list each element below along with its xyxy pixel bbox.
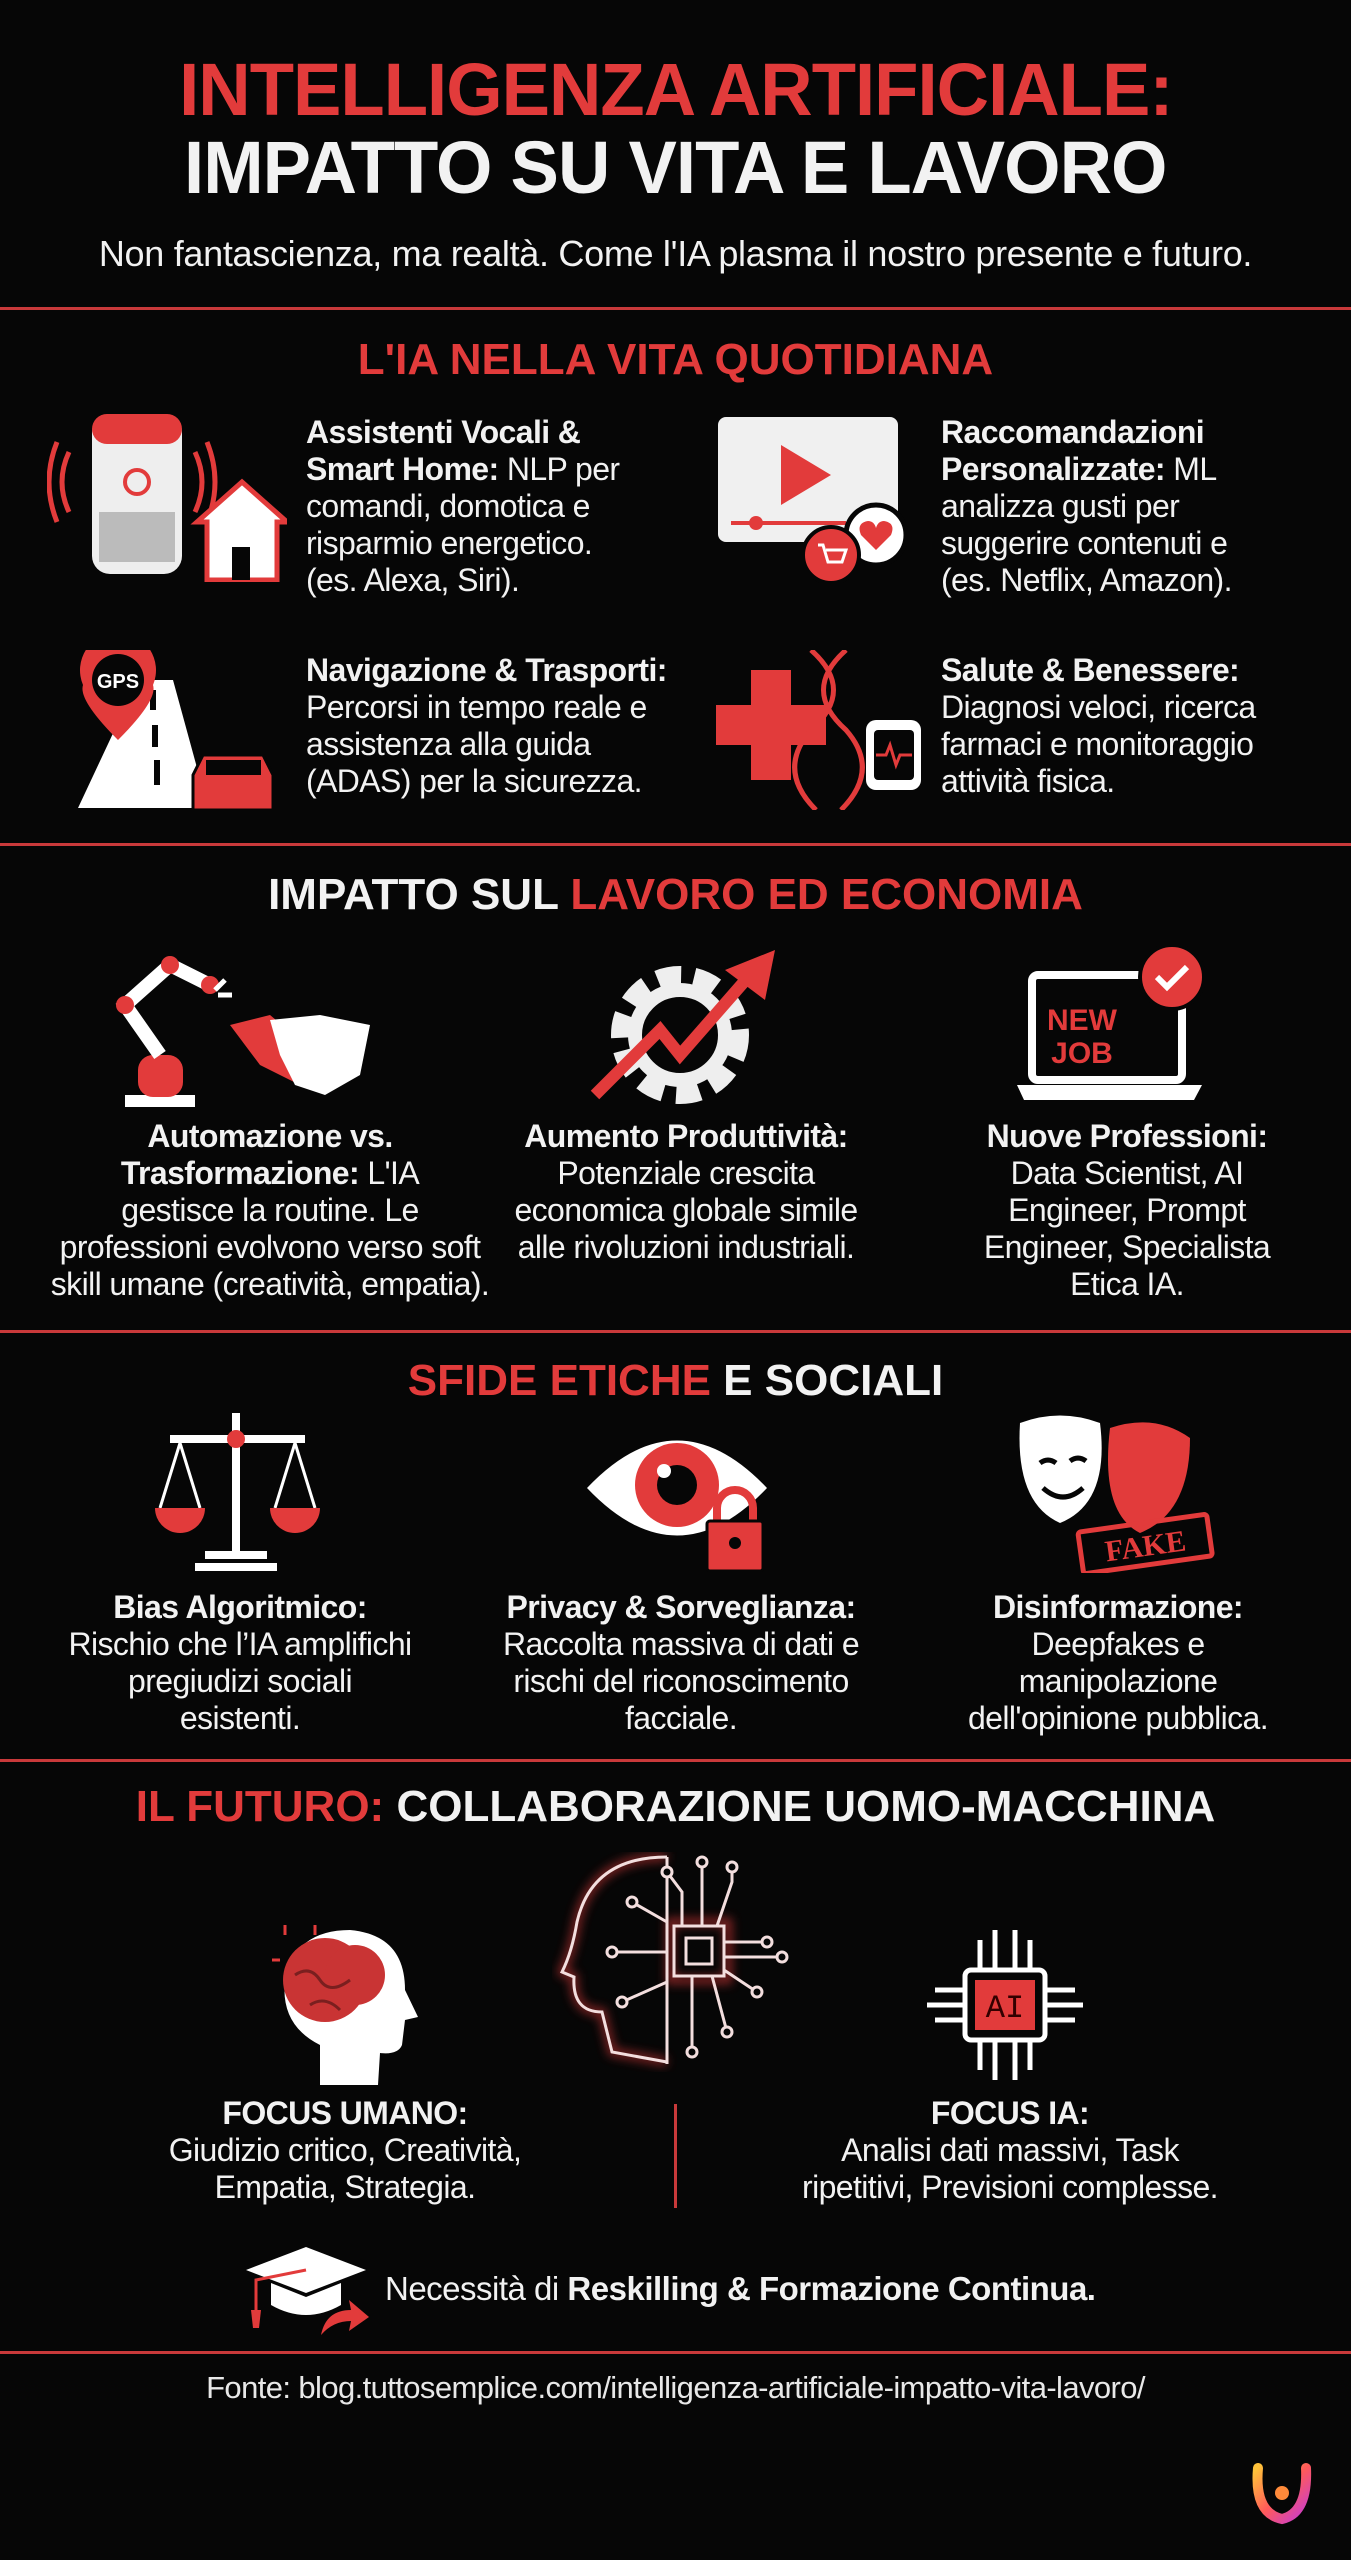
text: produttività: alle rivoluzioni industriali. xyxy=(518,1229,854,1265)
text: bias: esistenti. xyxy=(180,1700,300,1736)
text: salute xyxy=(941,652,1256,799)
icon: GPS navigation: GPS xyxy=(97,671,139,693)
text: raccomandazioni: Raccomandazioni xyxy=(941,414,1204,450)
icon: video recommendations xyxy=(718,417,904,581)
text: automazione xyxy=(51,1118,489,1302)
text: disinformazione: dell'opinione pubblica. xyxy=(968,1700,1268,1736)
text: nuove professioni: Nuove Professioni: xyxy=(987,1118,1267,1154)
text: raccomandazioni: Personalizzate: ML xyxy=(941,451,1217,487)
text: nuove professioni: Etica IA. xyxy=(1070,1266,1184,1302)
text: assistenti vocali: comandi, domotica e xyxy=(306,488,590,524)
text: reskilling: Necessità di Reskilling & Formazione Continua. xyxy=(385,2270,1095,2307)
text: focus umano: Empatia, Strategia. xyxy=(215,2169,475,2205)
subtitle: Non fantascienza, ma realtà. Come l'IA plasma il nostro presente e futuro. xyxy=(99,233,1252,274)
text: automazione: Automazione vs. xyxy=(147,1118,393,1154)
text: nuove professioni: Engineer, Specialista xyxy=(984,1229,1270,1265)
heading: lavoro: IMPATTO SUL xyxy=(268,870,558,919)
text: bias: pregiudizi sociali xyxy=(128,1663,352,1699)
text: raccomandazioni xyxy=(941,414,1232,598)
icon: masks fake xyxy=(1020,1416,1215,1573)
text: raccomandazioni: suggerire contenuti e xyxy=(941,525,1227,561)
heading: vita quotidiana: L'IA NELLA VITA QUOTIDIANA xyxy=(358,335,993,384)
heading: futuro: COLLABORAZIONE UOMO-MACCHINA xyxy=(396,1782,1215,1831)
text: focus umano: Giudizio critico, Creatività, xyxy=(169,2132,521,2168)
text: salute: farmaci e monitoraggio xyxy=(941,726,1253,762)
text: nuove professioni: Engineer, Prompt xyxy=(1008,1192,1246,1228)
icon: AI chip: AI xyxy=(986,1990,1024,2027)
icon: head brain circuit xyxy=(552,1852,788,2072)
text: produttività: Aumento Produttività: xyxy=(524,1118,848,1154)
text: nuove professioni: Data Scientist, AI xyxy=(1011,1155,1243,1191)
icon: eye & lock xyxy=(587,1440,767,1570)
title xyxy=(179,48,1172,209)
text: privacy: Raccolta massiva di dati e xyxy=(503,1626,859,1662)
text: privacy xyxy=(503,1589,859,1736)
text: navigazione: Percorsi in tempo reale e xyxy=(306,689,647,725)
heading: sfide etiche: SFIDE ETICHE xyxy=(408,1356,711,1405)
heading: sfide etiche: E SOCIALI xyxy=(723,1356,943,1405)
text: salute: Diagnosi veloci, ricerca xyxy=(941,689,1256,725)
text: produttività: economica globale simile xyxy=(514,1192,858,1228)
text: focus IA: ripetitivi, Previsioni complesse. xyxy=(802,2169,1218,2205)
text: focus umano xyxy=(169,2095,521,2205)
text: salute: Salute & Benessere: xyxy=(941,652,1239,688)
icon: new job laptop: JOB xyxy=(1051,1037,1113,1070)
text: bias xyxy=(68,1589,412,1736)
logo xyxy=(1252,2463,1312,2524)
text: focus umano: FOCUS UMANO: xyxy=(222,2095,468,2131)
text: disinformazione: Disinformazione: xyxy=(993,1589,1243,1625)
title: IMPATTO SU VITA E LAVORO xyxy=(184,126,1167,209)
text: automazione: gestisce la routine. Le xyxy=(121,1192,419,1228)
icon: health xyxy=(716,650,921,810)
icon: graduation cap xyxy=(246,2247,369,2335)
text: privacy: rischi del riconoscimento xyxy=(513,1663,849,1699)
text: disinformazione: Deepfakes e xyxy=(1031,1626,1205,1662)
text: produttività xyxy=(514,1118,858,1265)
heading: lavoro xyxy=(268,870,1083,919)
text: assistenti vocali: (es. Alexa, Siri). xyxy=(306,562,519,598)
heading: futuro: IL FUTURO: xyxy=(136,1782,384,1831)
text: navigazione: (ADAS) per la sicurezza. xyxy=(306,763,642,799)
text: focus IA: FOCUS IA: xyxy=(931,2095,1089,2131)
text: automazione: skill umane (creatività, empatia). xyxy=(51,1266,489,1302)
text: automazione: professioni evolvono verso soft xyxy=(60,1229,480,1265)
text: navigazione: assistenza alla guida xyxy=(306,726,590,762)
text: disinformazione: manipolazione xyxy=(1019,1663,1217,1699)
heading: lavoro: LAVORO ED ECONOMIA xyxy=(570,870,1083,919)
icon: human head with brain xyxy=(272,1925,418,2085)
text: bias: Rischio che l’IA amplifichi xyxy=(68,1626,412,1662)
text: assistenti vocali: risparmio energetico. xyxy=(306,525,592,561)
text: automazione: Trasformazione: L'IA xyxy=(121,1155,419,1191)
icon: robot arm & handshake xyxy=(116,956,370,1107)
text: assistenti vocali: Smart Home: NLP per xyxy=(306,451,619,487)
text: navigazione xyxy=(306,652,667,799)
text: focus IA xyxy=(802,2095,1218,2205)
text: navigazione: Navigazione & Trasporti: xyxy=(306,652,667,688)
text: raccomandazioni: (es. Netflix, Amazon). xyxy=(941,562,1232,598)
title: INTELLIGENZA ARTIFICIALE: xyxy=(179,48,1172,131)
text: assistenti vocali xyxy=(306,414,620,598)
icon: masks fake: FAKE xyxy=(1103,1524,1188,1568)
text: disinformazione xyxy=(968,1589,1268,1736)
icon: gear & growth xyxy=(590,950,775,1104)
icon: smart speaker and home xyxy=(47,414,287,582)
text: bias: Bias Algoritmico: xyxy=(113,1589,367,1625)
icon: new job laptop xyxy=(1017,947,1202,1100)
text: source: Fonte: blog.tuttosemplice.com/intelligenza-artificiale-impatto-vita-lavoro/ xyxy=(206,2370,1145,2405)
text: privacy: facciale. xyxy=(625,1700,737,1736)
text: nuove professioni xyxy=(984,1118,1271,1302)
text: produttività: Potenziale crescita xyxy=(557,1155,815,1191)
heading: sfide etiche xyxy=(408,1356,943,1405)
text: raccomandazioni: analizza gusti per xyxy=(941,488,1179,524)
text: assistenti vocali: Assistenti Vocali & xyxy=(306,414,580,450)
icon: scales xyxy=(155,1413,320,1571)
icon: AI chip xyxy=(927,1930,1083,2080)
divider xyxy=(674,2104,677,2208)
text: focus IA: Analisi dati massivi, Task xyxy=(841,2132,1179,2168)
text: salute: attività fisica. xyxy=(941,763,1115,799)
text: privacy: Privacy & Sorveglianza: xyxy=(506,1589,856,1625)
icon: GPS navigation xyxy=(78,650,272,808)
icon: new job laptop: NEW xyxy=(1047,1004,1118,1037)
